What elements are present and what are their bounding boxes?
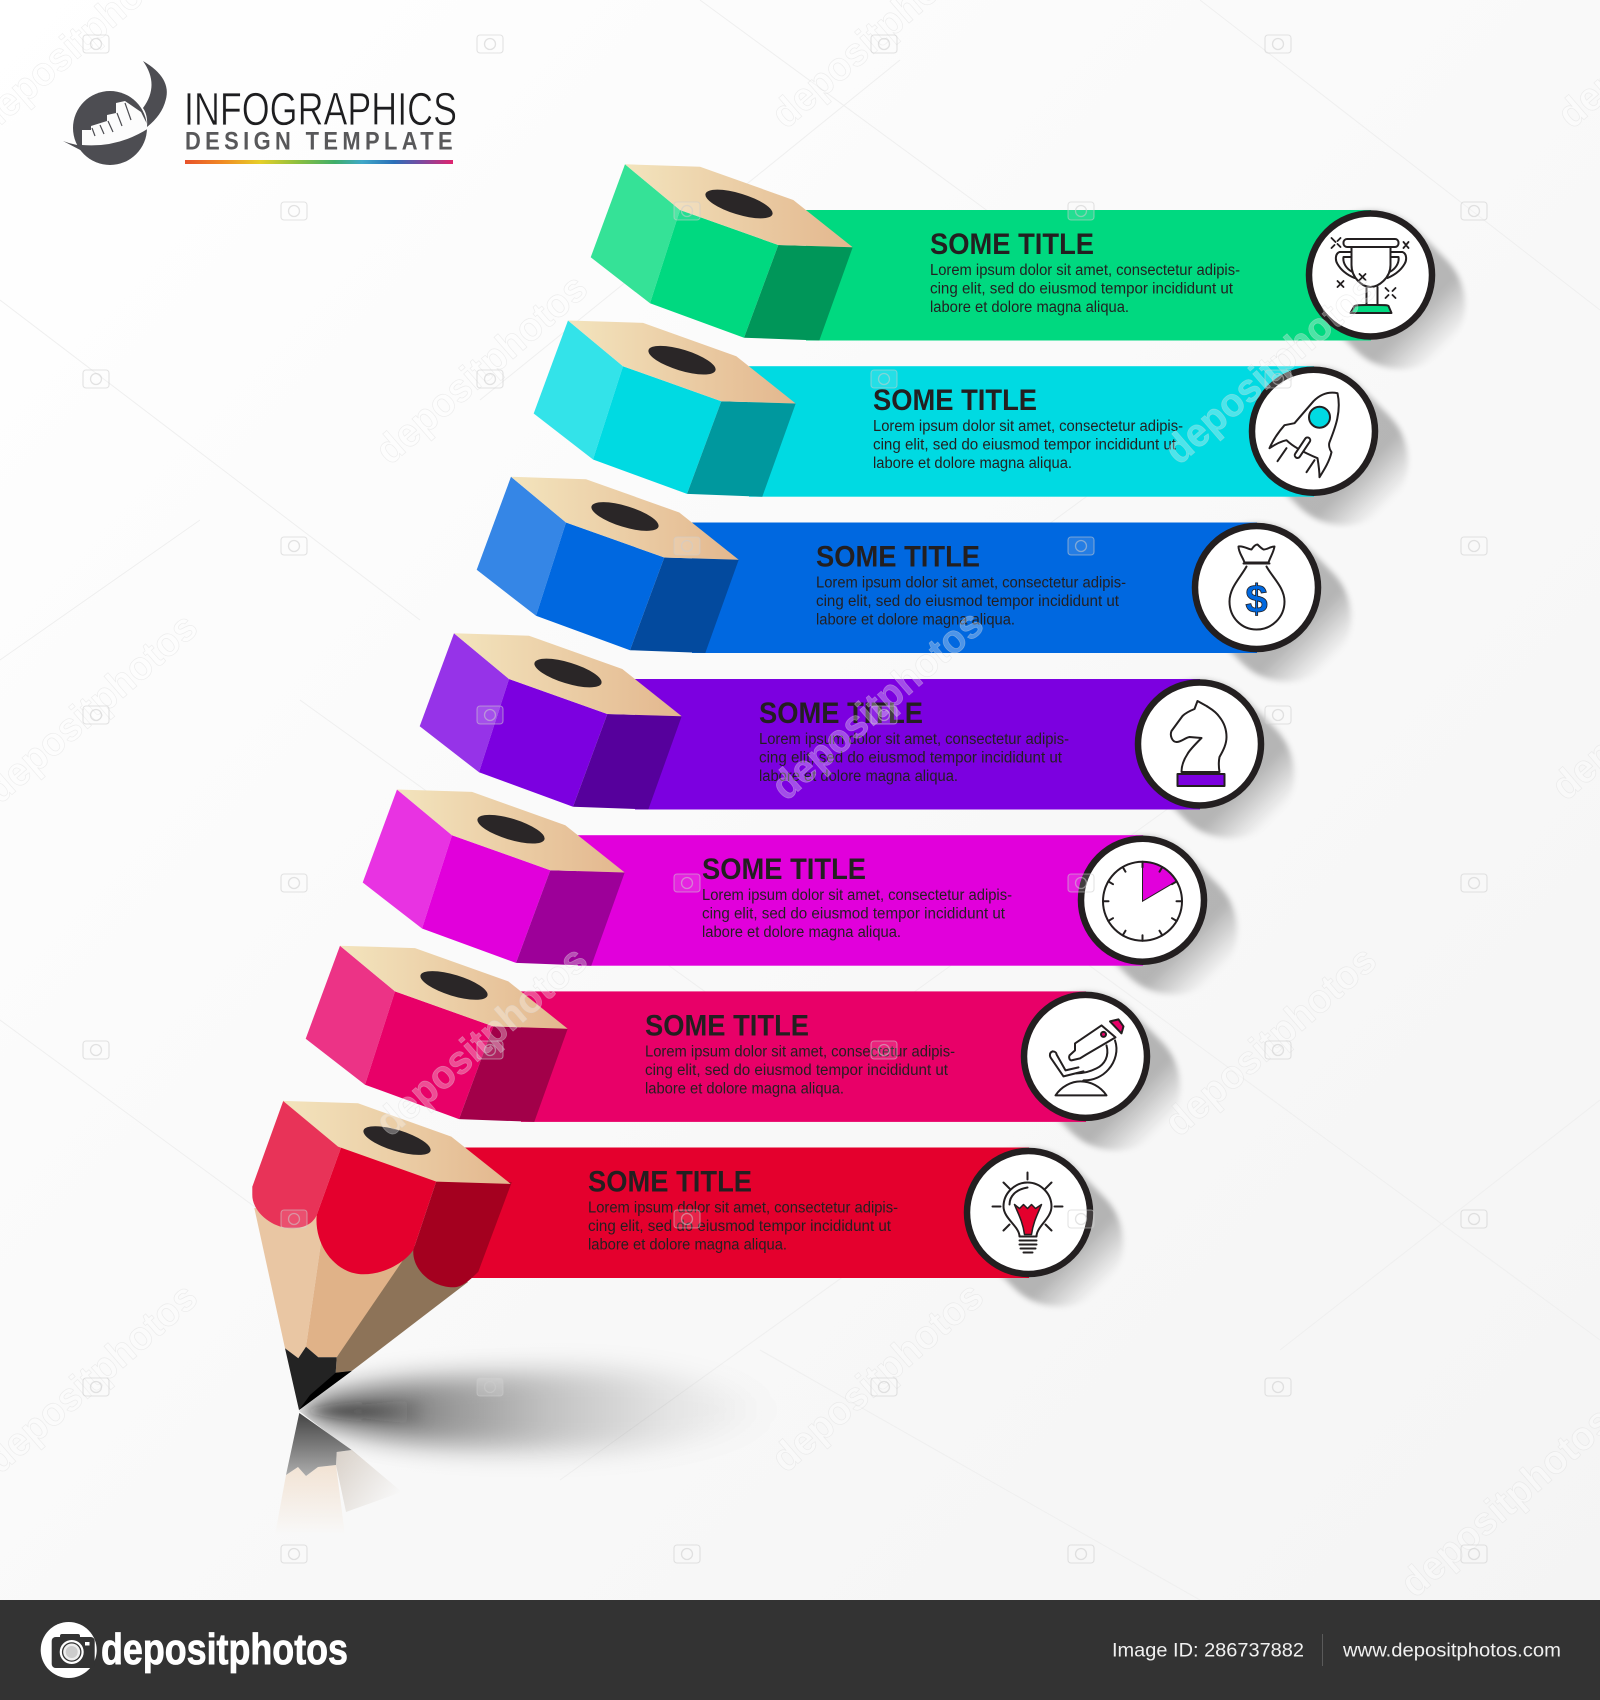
- step text: cing elit, sed do eiusmod tempor incididunt ut: [702, 906, 1006, 923]
- band: [521, 991, 1086, 1122]
- icon: microscope: [1024, 995, 1147, 1118]
- step text: Lorem ipsum dolor sit amet, consectetur adipis-: [930, 262, 1240, 279]
- pencil end: [534, 320, 796, 497]
- panel: step 2 (pink): [306, 946, 1147, 1122]
- icon: chess knight: [1138, 682, 1261, 806]
- band: [749, 366, 1314, 497]
- logo icon: [63, 61, 167, 165]
- icon: clock timer: [1081, 839, 1204, 962]
- watermark text: depositphotos: [367, 266, 596, 473]
- band: [806, 210, 1371, 340]
- band: [635, 679, 1200, 810]
- circle shadow: [1200, 744, 1230, 774]
- footer brand name: depositphotos: [101, 1625, 348, 1674]
- step text: [645, 1009, 955, 1097]
- circle shadow: [1371, 275, 1401, 305]
- circle shadow: [1257, 588, 1287, 618]
- panel: step 7 (green, top): [591, 164, 1432, 340]
- title: infographics: INFOGRAPHICS: [184, 83, 457, 135]
- rainbow rule: [185, 160, 453, 164]
- circle shadow: [1086, 1056, 1116, 1086]
- header: logo and title: [63, 61, 457, 165]
- watermark text: depositphotos: [763, 602, 992, 809]
- panel: step 4 (purple): [420, 633, 1261, 810]
- step text: Lorem ipsum dolor sit amet, consectetur adipis-: [702, 887, 1012, 904]
- step text: cing elit, sed do eiusmod tempor incididunt ut: [645, 1062, 949, 1079]
- panel: step 1 (red, pencil tip): [252, 1101, 1090, 1535]
- step text: [816, 540, 1126, 628]
- icon: rocket: [1252, 370, 1375, 493]
- step text: cing elit, sed do eiusmod tempor incididunt ut: [873, 437, 1177, 454]
- watermark text: depositphotos: [763, 1274, 992, 1481]
- watermark camera icons: [83, 35, 1487, 1563]
- step text: SOME TITLE: [702, 853, 866, 886]
- step text: [588, 1166, 898, 1254]
- band: [464, 1148, 1029, 1278]
- watermark text: depositphotos: [1156, 266, 1385, 473]
- circle shadow: [1314, 431, 1344, 461]
- icon: trophy: [1309, 214, 1432, 336]
- website: www.depositphotos.com: [1342, 1640, 1561, 1662]
- step text: Lorem ipsum dolor sit amet, consectetur adipis-: [816, 574, 1126, 592]
- pencil end: [420, 633, 682, 810]
- step text: [930, 228, 1240, 316]
- step text: labore et dolore magna aliqua.: [759, 768, 958, 785]
- panel: step 3 (magenta): [363, 790, 1204, 966]
- watermark text: depositphotos: [1156, 938, 1385, 1145]
- step text: labore et dolore magna aliqua.: [873, 455, 1072, 472]
- circle shadow: [1029, 1212, 1059, 1242]
- scalloped paint: right facet: [413, 1180, 512, 1287]
- panel: step 6 (cyan): [534, 320, 1375, 497]
- pencil with sharpened tip: [252, 1101, 512, 1410]
- scalloped paint: left facet: [252, 1101, 342, 1228]
- pencil top: [283, 1101, 511, 1184]
- footer bar: [0, 1600, 1600, 1700]
- pencil end: [306, 946, 568, 1122]
- step text: SOME TITLE: [588, 1166, 752, 1198]
- ground shadow: [300, 1370, 775, 1450]
- step text: [702, 853, 1012, 941]
- graphite tip: [285, 1347, 352, 1410]
- step text: SOME TITLE: [816, 540, 980, 574]
- step text: labore et dolore magna aliqua.: [702, 924, 901, 941]
- image id: Image ID: 286737882: [1112, 1640, 1304, 1662]
- band: [578, 835, 1143, 966]
- panel: step 5 (blue): [477, 477, 1318, 653]
- step text: cing elit, sed do eiusmod tempor incididunt ut: [816, 593, 1120, 610]
- watermark text: depositphotos: [367, 938, 596, 1145]
- step text: labore et dolore magna aliqua.: [816, 612, 1015, 628]
- step text: [759, 697, 1069, 785]
- step text: SOME TITLE: [759, 697, 923, 730]
- step text: cing elit, sed do eiusmod tempor incididunt ut: [930, 280, 1234, 298]
- icon: money bag: $: [1245, 578, 1268, 622]
- pencil end: [363, 790, 625, 966]
- circle shadow: [1143, 900, 1173, 930]
- step text: SOME TITLE: [873, 384, 1037, 417]
- icon: money bag: [1195, 526, 1318, 649]
- step text: labore et dolore magna aliqua.: [930, 299, 1129, 316]
- step text: [873, 384, 1183, 472]
- step text: SOME TITLE: [645, 1009, 809, 1042]
- step text: cing elit, sed do eiusmod tempor incididunt ut: [588, 1218, 892, 1235]
- icon: light bulb: [967, 1151, 1090, 1274]
- step text: Lorem ipsum dolor sit amet, consectetur adipis-: [759, 731, 1069, 748]
- pencil end: [591, 164, 853, 340]
- wood cone: [254, 1208, 325, 1358]
- step text: labore et dolore magna aliqua.: [645, 1080, 844, 1097]
- footer logo icon: [41, 1622, 97, 1678]
- pencil end: [477, 477, 739, 653]
- step text: Lorem ipsum dolor sit amet, consectetur adipis-: [645, 1043, 955, 1060]
- step text: cing elit, sed do eiusmod tempor incididunt ut: [759, 750, 1063, 766]
- step text: Lorem ipsum dolor sit amet, consectetur adipis-: [873, 418, 1183, 435]
- pencil reflection: [275, 1413, 402, 1535]
- subtitle: design template: DESIGN TEMPLATE: [185, 128, 457, 156]
- scalloped paint: middle facet: [316, 1146, 437, 1274]
- band: [692, 522, 1257, 653]
- step text: SOME TITLE: [930, 228, 1094, 261]
- step text: labore et dolore magna aliqua.: [588, 1236, 787, 1254]
- step text: Lorem ipsum dolor sit amet, consectetur adipis-: [588, 1200, 898, 1216]
